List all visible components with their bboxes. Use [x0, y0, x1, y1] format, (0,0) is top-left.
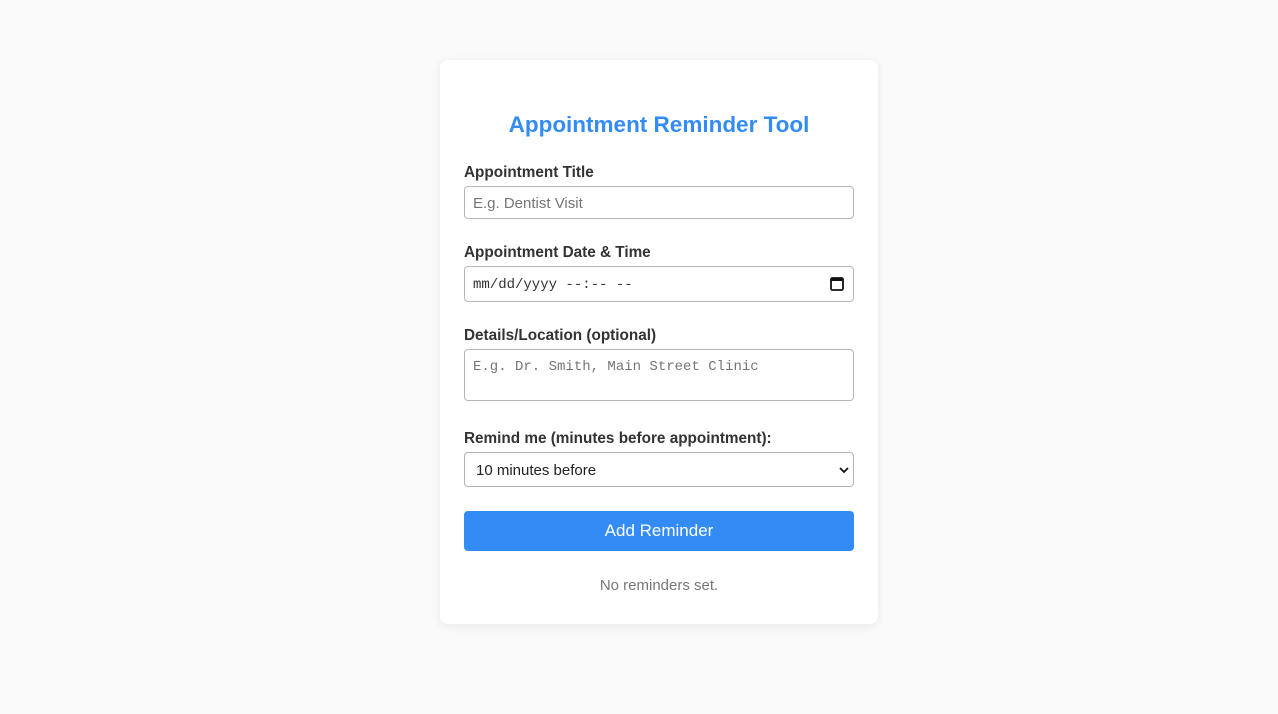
select: minutes — [464, 452, 854, 487]
textarea: details — [464, 349, 854, 401]
input: title — [464, 186, 854, 219]
label: date time: Appointment Date & Time — [464, 244, 651, 261]
input: date time — [464, 266, 854, 302]
button: add reminder: Add Reminder — [605, 521, 713, 540]
textarea: details: E.g. Dr. Smith, Main Street Clinic — [473, 359, 759, 375]
status text: No reminders set. — [600, 577, 718, 594]
label: appointment title: Appointment Title — [464, 164, 594, 181]
label: remind me: Remind me (minutes before appointment): — [464, 430, 772, 447]
input: date time: mm/dd/yyyy --:-- -- — [473, 277, 633, 293]
label: details: Details/Location (optional) — [464, 327, 656, 344]
title: Appointment Reminder Tool — [509, 112, 809, 137]
select: minutes: 10 minutes before — [476, 462, 596, 479]
button: add reminder — [464, 511, 854, 551]
input: title: E.g. Dentist Visit — [473, 195, 583, 212]
card: appointment form — [440, 60, 878, 624]
